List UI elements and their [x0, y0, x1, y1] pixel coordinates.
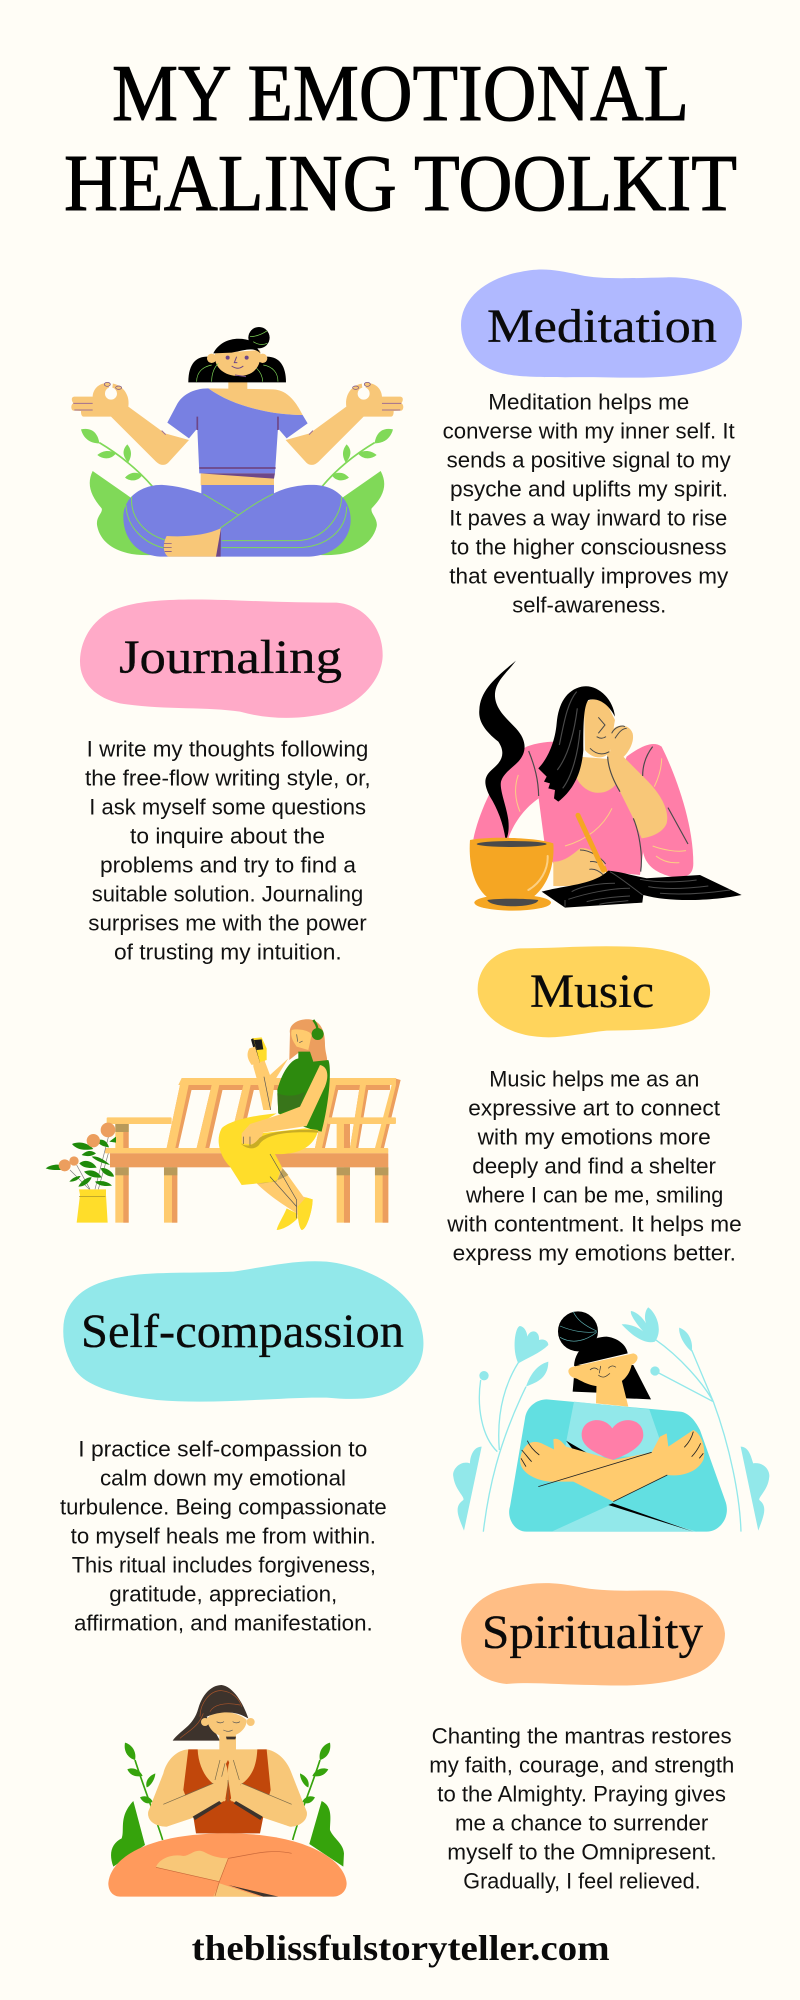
panel: spirituality heading [461, 1583, 725, 1686]
text block: meditation: to the higher consciousness [451, 534, 727, 559]
text block: journaling [85, 737, 371, 965]
text block: meditation: It paves a way inward to rise [449, 505, 727, 530]
text block: music: expressive art to connect [468, 1096, 720, 1121]
text block: self-compassion [60, 1437, 387, 1636]
illustration: woman listening to music on bench [46, 1019, 401, 1230]
panel: meditation heading: Meditation [487, 300, 717, 353]
text block: music: deeply and find a shelter [472, 1154, 716, 1179]
text block: music: with contentment. It helps me [446, 1212, 742, 1237]
text block: music [446, 1067, 742, 1266]
text block: music: express my emotions better. [453, 1241, 736, 1266]
illustration: meditating woman [71, 327, 403, 557]
text block: journaling: to inquire about the [130, 824, 325, 849]
text block: journaling: problems and try to find a [100, 853, 357, 878]
text block: spirituality [429, 1723, 734, 1893]
text block: self-compassion: affirmation, and manifestation. [74, 1611, 373, 1636]
panel: self-compassion heading [63, 1261, 423, 1402]
text block: meditation: Meditation helps me [488, 389, 689, 414]
title [64, 50, 737, 228]
text block: meditation: converse with my inner self. It [443, 418, 735, 443]
text block: spirituality: myself to the Omnipresent. [447, 1839, 717, 1864]
text block: spirituality: me a chance to surrender [455, 1810, 708, 1835]
text block: self-compassion: gratitude, appreciation, [109, 1582, 337, 1607]
text block: meditation [443, 389, 735, 617]
panel: spirituality heading: Spirituality [482, 1606, 703, 1659]
text block: self-compassion: calm down my emotional [100, 1466, 346, 1491]
text block: music: Music helps me as an [489, 1067, 699, 1092]
text block: self-compassion: to myself heals me from within. [71, 1524, 376, 1549]
text block: music: with my emotions more [477, 1125, 711, 1150]
panel: music heading: Music [530, 965, 654, 1018]
text block: journaling: of trusting my intuition. [114, 940, 342, 965]
text block: meditation: psyche and uplifts my spirit. [450, 476, 728, 501]
text block: meditation: self-awareness. [512, 592, 666, 617]
text block: meditation: that eventually improves my [449, 563, 728, 588]
text block: journaling: the free-flow writing style, or, [85, 766, 371, 791]
text block: spirituality: Gradually, I feel relieved. [463, 1868, 701, 1893]
panel: music heading [478, 946, 710, 1037]
plant [46, 1123, 116, 1223]
bench [105, 1078, 401, 1223]
footer website: theblissfulstoryteller.com [192, 1928, 610, 1968]
text block: music: where I can be me, smiling [465, 1183, 723, 1208]
illustration: woman praying [108, 1685, 347, 1897]
panel: meditation heading [461, 269, 742, 378]
text block: spirituality: to the Almighty. Praying gives [437, 1781, 726, 1806]
panel: journaling heading [80, 599, 383, 718]
woman [219, 1019, 330, 1230]
illustration: woman hugging herself [453, 1307, 769, 1532]
text block: self-compassion: I practice self-compassion to [78, 1437, 367, 1462]
title: HEALING TOOLKIT [64, 140, 737, 228]
text block: meditation: sends a positive signal to my [447, 447, 731, 472]
text block: self-compassion: turbulence. Being compassionate [60, 1495, 387, 1520]
text block: spirituality: Chanting the mantras restores [432, 1723, 732, 1748]
text block: spirituality: my faith, courage, and strength [429, 1752, 734, 1777]
text block: journaling: suitable solution. Journaling [92, 882, 363, 907]
title: MY EMOTIONAL [112, 50, 689, 138]
text block: journaling: I write my thoughts following [87, 737, 368, 762]
text block: journaling: surprises me with the power [88, 911, 367, 936]
panel: self-compassion heading: Self-compassion [81, 1305, 404, 1358]
text block: journaling: I ask myself some questions [89, 795, 366, 820]
illustration: woman journaling with coffee [470, 661, 742, 911]
text block: self-compassion: This ritual includes forgiveness, [72, 1553, 376, 1578]
panel: journaling heading: Journaling [119, 631, 342, 684]
